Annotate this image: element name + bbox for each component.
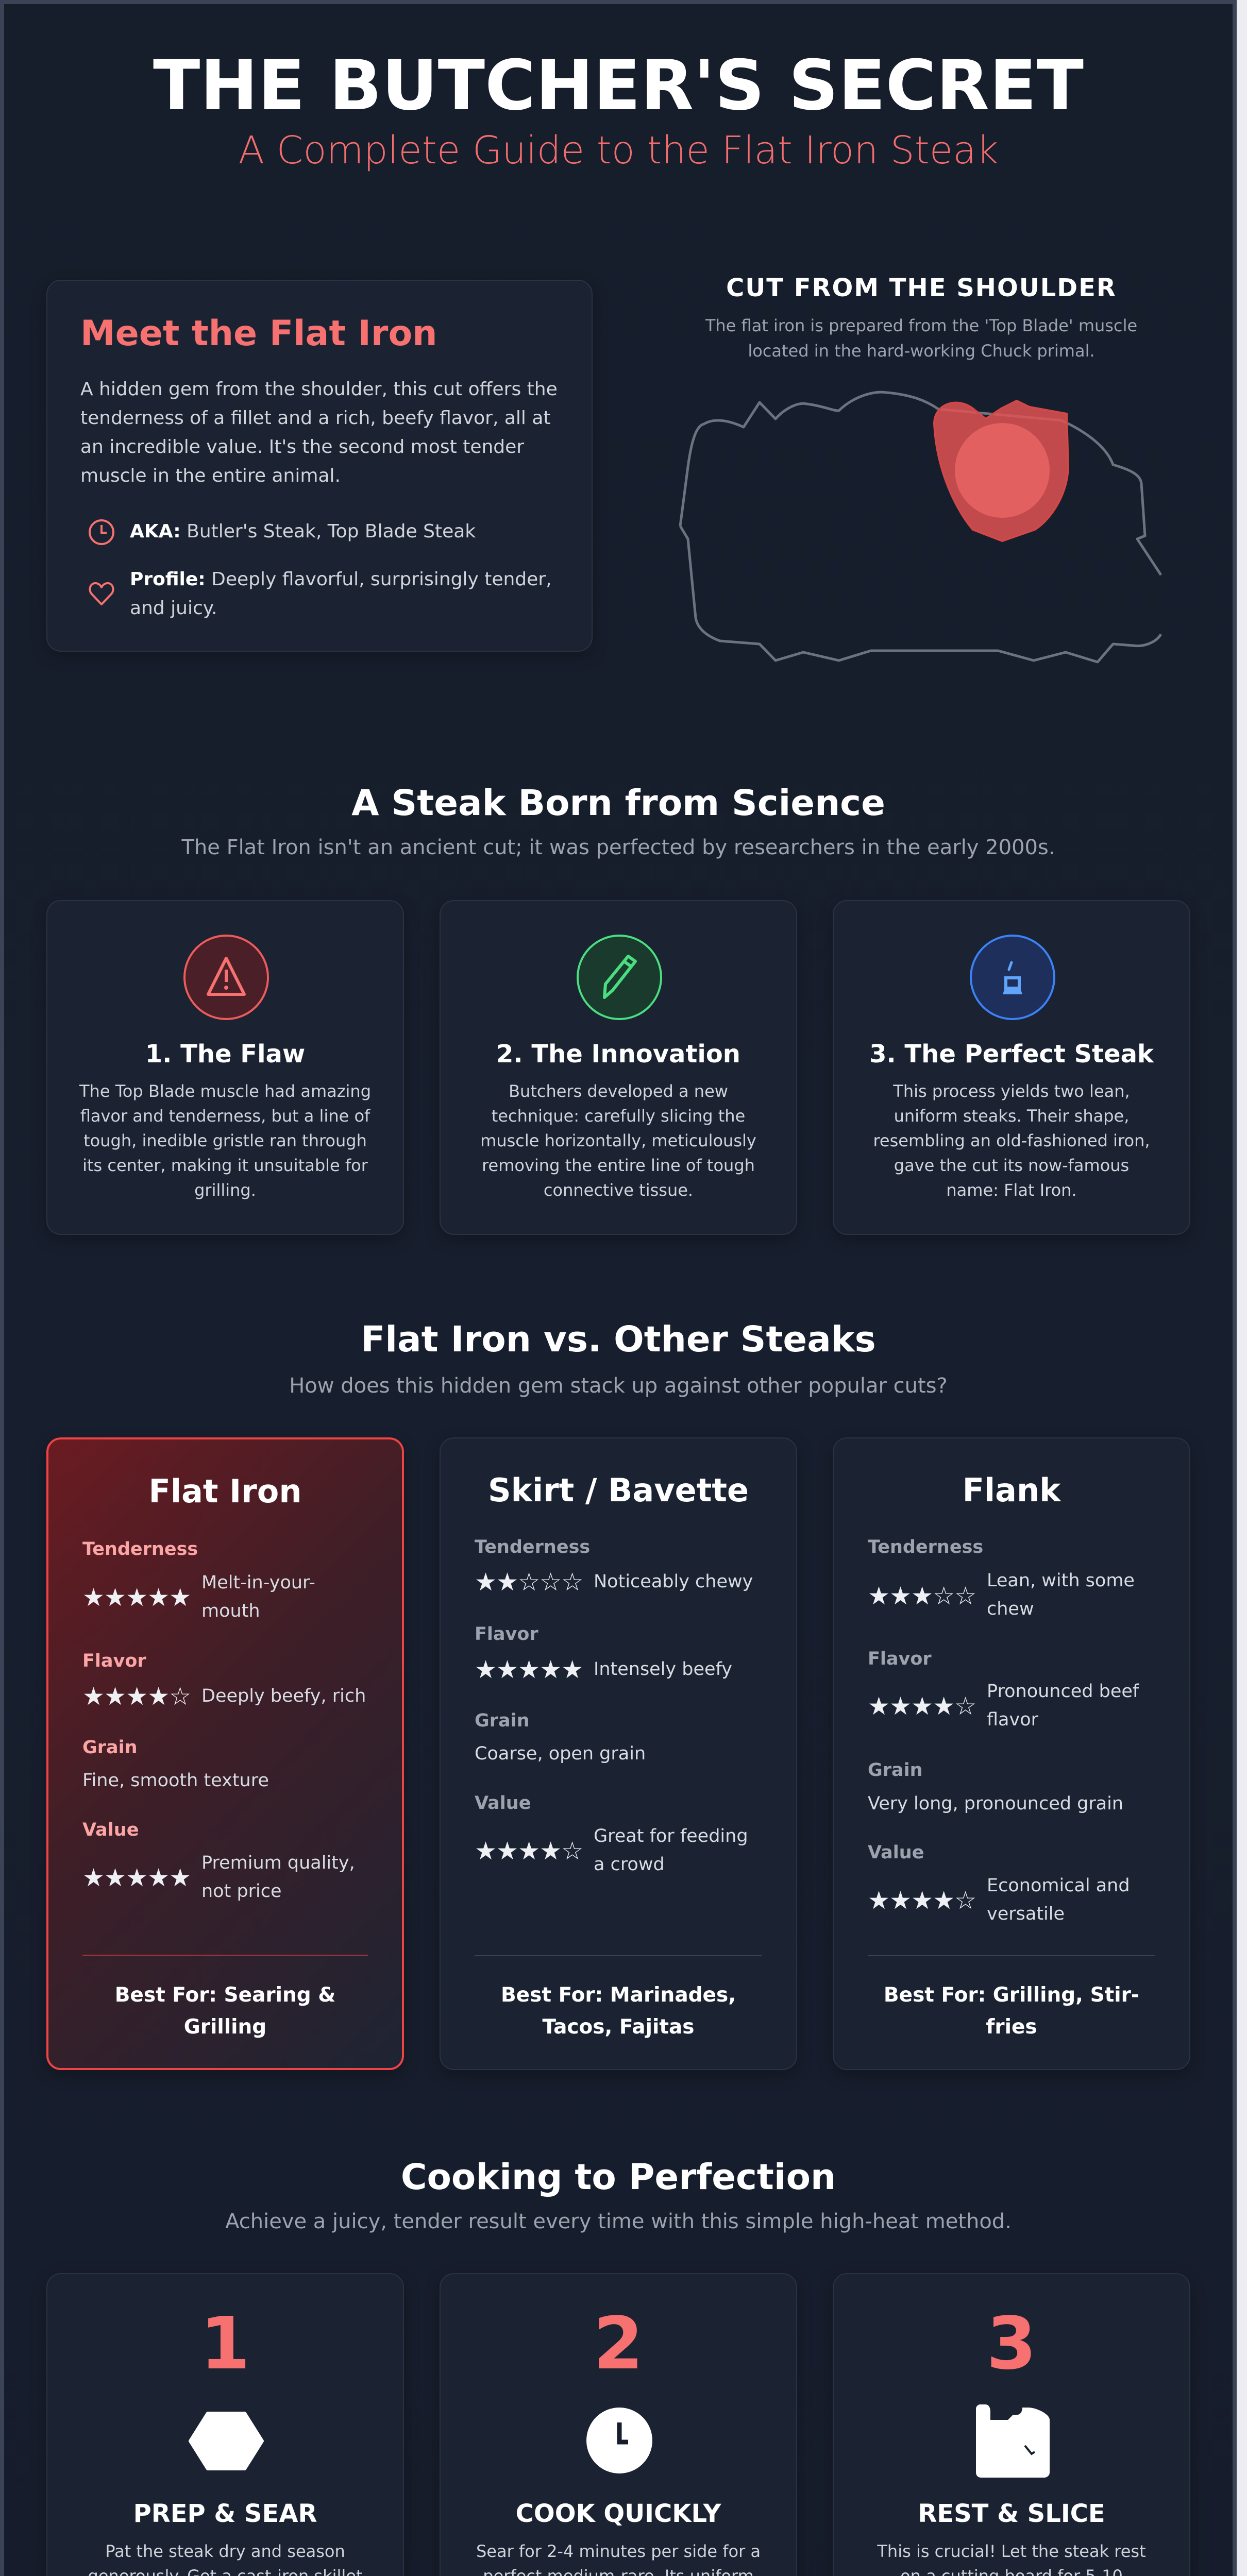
panel: flank comparison: flavor — [987, 1709, 1038, 1730]
text: flaw: The Top Blade muscle had amazing — [79, 1081, 371, 1101]
panel: flat iron comparison: mouth — [201, 1601, 260, 1621]
heading: a steak born from science: A Steak Born from Science — [351, 783, 885, 824]
panel: flat iron comparison: not price — [201, 1881, 282, 1902]
text: best for: fries — [986, 2015, 1037, 2039]
row: grain: Grain — [868, 1760, 923, 1781]
text: prep: Pat the steak dry and season — [105, 2541, 345, 2561]
panel: skirt comparison: ★★★★★ — [475, 1655, 583, 1684]
text: best for — [501, 1984, 736, 2039]
panel: flank comparison: chew — [987, 1599, 1034, 1619]
text: flaw: tough, inedible gristle ran through — [83, 1131, 367, 1150]
row: flavor: Flavor — [868, 1649, 932, 1669]
text: shoulder caption: The flat iron is prepared from the 'Top Blade' muscle — [705, 316, 1137, 335]
panel: skirt comparison: a crowd — [594, 1854, 665, 1875]
subtitle: A Complete Guide to the Flat Iron Steak — [239, 128, 998, 173]
icon: iron — [970, 935, 1055, 1020]
panel: flat iron comparison: ★★★★★ — [82, 1863, 191, 1892]
text: rest: This is crucial! Let the steak rest — [877, 2541, 1146, 2561]
panel: flank comparison: Economical and — [987, 1875, 1130, 1896]
text: perfect steak: resembling an old-fashioned iron, — [873, 1131, 1150, 1150]
panel: flank comparison: Lean, with some — [987, 1570, 1135, 1591]
text: innovation: removing the entire line of tough — [482, 1156, 755, 1175]
text: flaw: its center, making it unsuitable for — [82, 1156, 368, 1175]
panel: flank comparison — [833, 1437, 1190, 2070]
text: flaw: flavor and tenderness, but a line of — [80, 1106, 370, 1126]
text: flaw — [79, 1081, 371, 1200]
text: perfect steak: uniform steaks. Their shape, — [894, 1106, 1129, 1126]
text: aka: AKA: Butler's Steak, Top Blade Steak — [130, 521, 476, 542]
text: shoulder caption — [705, 316, 1137, 361]
text: shoulder caption: located in the hard-working Chuck primal. — [748, 341, 1095, 361]
heading: cut from the shoulder: CUT FROM THE SHOULDER — [726, 274, 1117, 302]
text: perfect steak — [873, 1081, 1150, 1200]
text: intro paragraph: tenderness of a fillet and a rich, beefy flavor, all at — [80, 408, 551, 429]
text: intro paragraph — [80, 379, 558, 486]
panel: step 1 prep & sear — [46, 2273, 404, 2576]
text: intro paragraph: muscle in the entire animal. — [80, 465, 341, 486]
text: innovation: connective tissue. — [544, 1180, 693, 1200]
icon: cutting board — [976, 2404, 1050, 2478]
row: grain: Grain — [82, 1737, 138, 1758]
text: perfect steak: gave the cut its now-famous — [894, 1156, 1129, 1175]
row: flavor: Flavor — [82, 1651, 146, 1671]
panel: flank comparison: Pronounced beef — [987, 1681, 1139, 1702]
heading: flat iron vs other steaks: Flat Iron vs. Other Steaks — [361, 1319, 876, 1360]
subtitle: science: The Flat Iron isn't an ancient cut; it was perfected by researchers in the early 2000s. — [181, 836, 1055, 859]
icon: warning — [183, 935, 269, 1020]
panel: skirt comparison: ★★★★☆ — [475, 1837, 583, 1866]
icon: hexagon — [189, 2412, 264, 2470]
title: the innovation: 2. The Innovation — [496, 1040, 740, 1069]
text: best for — [115, 1984, 335, 2039]
text: intro paragraph: an incredible value. It's the second most tender — [80, 436, 524, 457]
title: skirt: Skirt / Bavette — [488, 1471, 749, 1509]
row: value: Value — [868, 1842, 924, 1863]
title: cook quickly: COOK QUICKLY — [516, 2499, 721, 2528]
row: value: Value — [82, 1820, 139, 1840]
row: grain: Grain — [475, 1710, 530, 1731]
panel: flank comparison: ★★★★☆ — [868, 1692, 976, 1721]
text: rest — [877, 2541, 1146, 2576]
text: best for: Tacos, Fajitas — [542, 2015, 695, 2039]
subtitle: comparison: How does this hidden gem stack up against other popular cuts? — [289, 1374, 948, 1398]
text: cook: Sear for 2-4 minutes per side for a — [476, 2541, 761, 2561]
panel: flank comparison: ★★★☆☆ — [868, 1582, 976, 1611]
panel: meet the flat iron — [46, 280, 593, 652]
panel: flank comparison: ★★★★☆ — [868, 1886, 976, 1915]
row: value: Value — [475, 1793, 531, 1814]
heading: cooking to perfection: Cooking to Perfection — [401, 2157, 836, 2198]
row: tenderness: Tenderness — [82, 1539, 198, 1560]
panel: flat iron comparison: Fine, smooth texture — [82, 1770, 269, 1791]
text: profile — [130, 569, 552, 619]
text: best for — [884, 1984, 1139, 2039]
panel: flat iron comparison: ★★★★☆ — [82, 1682, 191, 1711]
text: intro paragraph: A hidden gem from the shoulder, this cut offers the — [80, 379, 558, 400]
text: innovation: muscle horizontally, meticulously — [480, 1131, 756, 1150]
number 1: 1 — [200, 2302, 250, 2386]
panel: flat iron comparison — [46, 1437, 404, 2070]
title: rest & slice: REST & SLICE — [918, 2499, 1105, 2528]
text: innovation — [480, 1081, 756, 1200]
icon: pencil — [577, 935, 662, 1020]
panel: flat iron comparison: Premium quality, — [201, 1853, 355, 1873]
panel: the perfect steak — [833, 900, 1190, 1235]
text: best for: Grilling — [184, 2015, 266, 2039]
icon: heart — [89, 582, 114, 606]
panel: flank comparison: Very long, pronounced grain — [868, 1793, 1123, 1814]
panel: the innovation — [440, 900, 797, 1235]
panel: skirt comparison: Noticeably chewy — [594, 1571, 753, 1592]
title: THE BUTCHER'S SECRET — [153, 45, 1084, 126]
panel: skirt comparison: Coarse, open grain — [475, 1743, 646, 1764]
text: profile: and juicy. — [130, 598, 217, 619]
panel: skirt comparison: Great for feeding — [594, 1826, 748, 1846]
diagram: cow chuck outline with top blade — [679, 391, 1162, 664]
row: flavor: Flavor — [475, 1624, 538, 1645]
panel: skirt comparison — [440, 1437, 797, 2070]
icon: clock — [89, 519, 114, 545]
title: the flaw: 1. The Flaw — [145, 1040, 305, 1069]
panel: flat iron comparison: Deeply beefy, rich — [201, 1686, 366, 1706]
heading: meet the flat iron: Meet the Flat Iron — [80, 313, 437, 354]
text: perfect steak: name: Flat Iron. — [946, 1180, 1077, 1200]
panel: the flaw — [46, 900, 404, 1235]
text: perfect steak: This process yields two lean, — [893, 1081, 1130, 1101]
panel: skirt comparison: Intensely beefy — [594, 1659, 732, 1680]
text: best for: Best For: Searing & — [115, 1984, 335, 2007]
panel: step 3 rest & slice — [833, 2273, 1190, 2576]
title: prep & sear: PREP & SEAR — [133, 2499, 317, 2528]
panel: step 2 cook quickly — [440, 2273, 797, 2576]
text: profile: Profile: Deeply flavorful, surprisingly tender, — [130, 569, 552, 590]
row: tenderness: Tenderness — [475, 1537, 590, 1557]
text: innovation: Butchers developed a new — [509, 1081, 728, 1101]
subtitle: cooking: Achieve a juicy, tender result every time with this simple high-heat method. — [225, 2210, 1012, 2233]
text: innovation: technique: carefully slicing the — [492, 1106, 745, 1126]
number 2: 2 — [593, 2302, 644, 2386]
panel: skirt comparison: ★★☆☆☆ — [475, 1568, 583, 1597]
number 3: 3 — [986, 2302, 1037, 2386]
panel: flat iron comparison: Melt-in-your- — [201, 1572, 315, 1593]
title: the perfect steak: 3. The Perfect Steak — [869, 1040, 1154, 1069]
title: flank: Flank — [963, 1471, 1060, 1509]
title: flat iron: Flat Iron — [148, 1472, 302, 1510]
icon: clock — [586, 2408, 652, 2473]
text: best for: Best For: Grilling, Stir- — [884, 1984, 1139, 2007]
panel: flank comparison: versatile — [987, 1904, 1065, 1924]
row: tenderness: Tenderness — [868, 1537, 983, 1557]
text: cook — [476, 2541, 761, 2576]
text: best for: Best For: Marinades, — [501, 1984, 736, 2007]
text: prep — [88, 2541, 363, 2576]
text: flaw: grilling. — [194, 1180, 256, 1200]
panel: flat iron comparison: ★★★★★ — [82, 1583, 191, 1612]
